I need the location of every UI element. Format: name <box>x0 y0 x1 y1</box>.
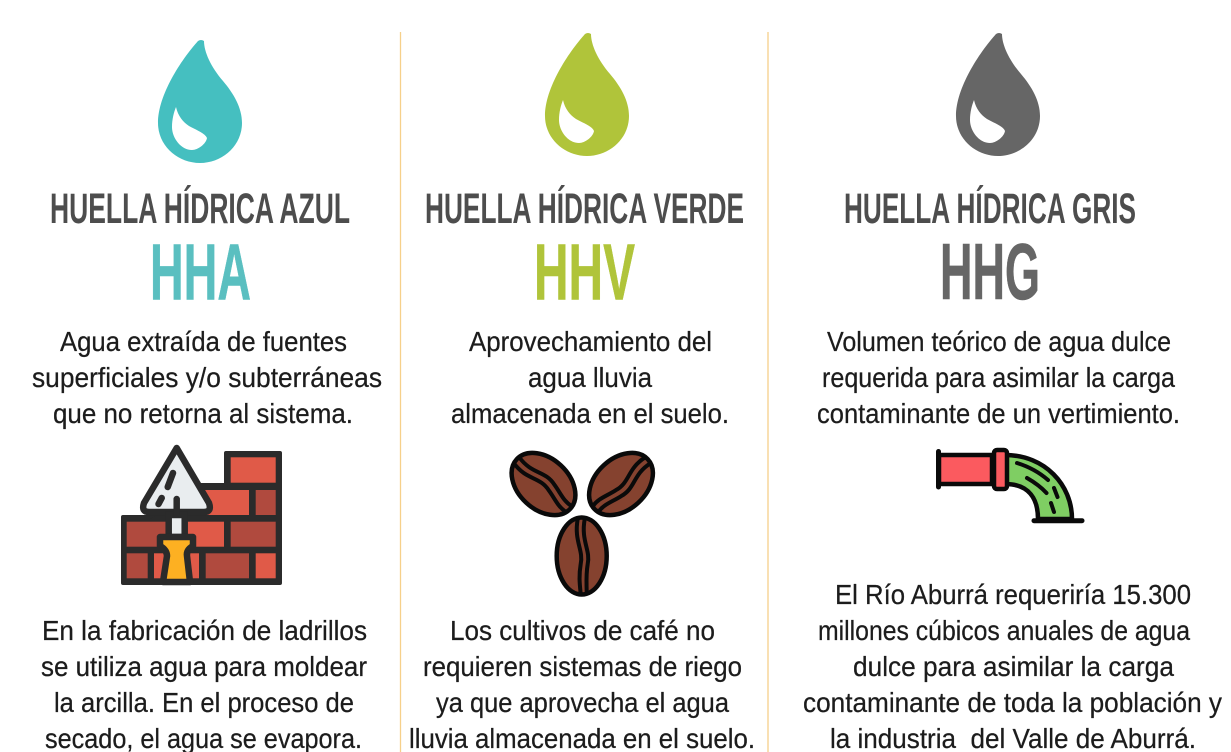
example text: ladrillos: la arcilla. En el proceso de <box>54 687 354 718</box>
definition text: gris: Volumen teórico de agua dulce <box>827 326 1171 357</box>
example text: café: requieren sistemas de riego <box>423 651 742 682</box>
icon: green water drop <box>545 33 629 156</box>
icon: discharge pipe <box>938 450 1082 521</box>
definition text: verde: almacenada en el suelo. <box>451 398 729 429</box>
example text: ladrillos: se utiliza agua para moldear <box>41 651 367 682</box>
example text: café: ya que aprovecha el agua <box>436 687 729 718</box>
acronym: HHA: HHA <box>150 228 251 316</box>
example text: ladrillos <box>41 615 367 752</box>
example text: Río Aburrá: dulce para asimilar la carga <box>853 651 1174 682</box>
definition text: azul: superficiales y/o subterráneas <box>32 362 382 393</box>
icon: brick wall with trowel <box>123 448 280 583</box>
heading: huella hídrica verde: HUELLA HÍDRICA VERDE <box>425 185 744 233</box>
definition text: verde: agua lluvia <box>528 362 652 393</box>
definition text: azul: Agua extraída de fuentes <box>60 326 347 357</box>
heading: huella hídrica azul: HUELLA HÍDRICA AZUL <box>50 185 350 233</box>
definition text: azul <box>32 326 382 429</box>
example text: ladrillos: En la fabricación de ladrillos <box>42 615 367 646</box>
definition text: gris: contaminante de un vertimiento. <box>817 398 1180 429</box>
acronym: HHG: HHG <box>940 227 1040 316</box>
example text: café: Los cultivos de café no <box>450 615 715 646</box>
panel: huella hídrica gris <box>803 33 1222 752</box>
definition text: verde <box>451 326 729 429</box>
icon: grey water drop <box>956 33 1040 156</box>
example text: Río Aburrá <box>803 579 1222 752</box>
definition text: verde: Aprovechamiento del <box>469 326 712 357</box>
definition text: gris: requerida para asimilar la carga <box>822 362 1175 393</box>
icon: coffee beans <box>499 440 665 594</box>
example text: Río Aburrá: El Río Aburrá requeriría 15.300 <box>835 579 1191 610</box>
panel: huella hídrica azul <box>32 40 382 752</box>
definition text: gris <box>817 326 1180 429</box>
panel: huella hídrica verde <box>409 33 755 752</box>
example text: café <box>409 615 755 752</box>
acronym: HHV: HHV <box>534 228 635 316</box>
definition text: azul: que no retorna al sistema. <box>53 398 353 429</box>
example text: Río Aburrá: millones cúbicos anuales de agua <box>818 615 1190 646</box>
icon: blue water drop <box>158 40 242 163</box>
